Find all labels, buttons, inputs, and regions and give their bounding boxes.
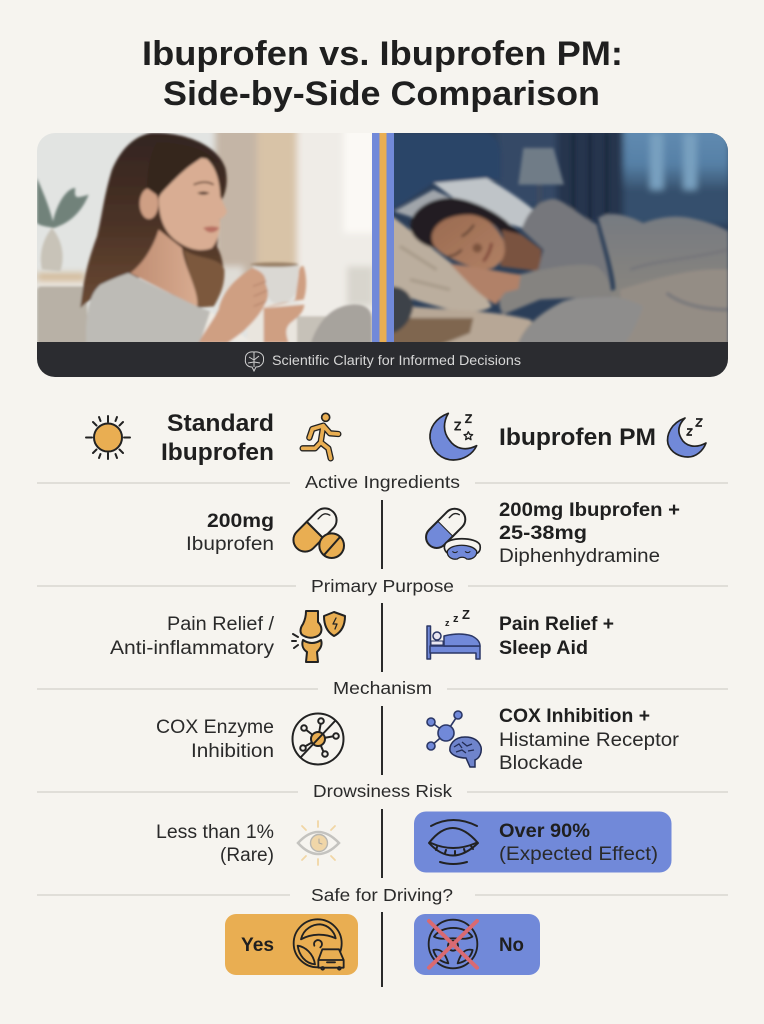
section: drowsiness risk: Drowsiness Risk	[313, 781, 452, 801]
icon: small moon	[668, 418, 706, 457]
drowsiness: pm callout: (Expected Effect)	[499, 844, 658, 865]
mechanism: pm: COX Inhibition +	[499, 706, 650, 727]
drowsiness: pm callout	[414, 812, 672, 872]
ear	[140, 188, 158, 219]
mechanism: pm	[427, 706, 680, 774]
mechanism: standard	[156, 714, 344, 764]
caption bar: Scientific Clarity for Informed Decisions	[272, 353, 521, 368]
title: Side-by-Side Comparison	[163, 75, 600, 113]
ingredient: pm: 25-38mg	[499, 523, 587, 544]
back pillows	[433, 178, 533, 228]
drowsiness: pm callout: Over 90%	[499, 821, 590, 842]
mechanism: pm: Histamine Receptor	[499, 730, 680, 751]
icon: knee joint and shield	[292, 611, 345, 662]
plant and vase	[41, 228, 63, 271]
drowsiness: standard: (Rare)	[220, 845, 274, 866]
icon: sun	[86, 416, 130, 459]
blanket	[526, 211, 728, 329]
right hand	[264, 266, 306, 343]
mug	[251, 265, 299, 304]
photo: woman sleeping	[390, 126, 730, 346]
hair	[80, 133, 227, 308]
icon: closed eye	[429, 820, 478, 864]
column header: ibuprofen pm	[430, 413, 706, 460]
drowsiness: standard: Less than 1%	[156, 822, 274, 843]
icon: person sleeping in bed: z	[445, 618, 450, 628]
ingredient: standard: Ibuprofen	[186, 534, 274, 555]
column header: standard ibuprofen: Ibuprofen	[161, 439, 274, 466]
icon: person sleeping in bed: z	[453, 613, 459, 625]
ingredient: standard: 200mg	[207, 511, 274, 532]
icon: moon with stars	[430, 413, 477, 460]
hero image panel	[37, 126, 730, 377]
section: mechanism: Mechanism	[333, 678, 432, 698]
facial features	[194, 182, 214, 185]
purpose: pm	[427, 607, 614, 659]
shirt	[86, 273, 210, 345]
mechanism: standard: Inhibition	[191, 741, 274, 762]
caption bar	[37, 342, 728, 377]
icon: blocked enzyme	[292, 714, 344, 764]
driving: yes badge	[225, 914, 358, 975]
purpose: standard: Pain Relief /	[167, 614, 275, 635]
drowsiness: standard	[156, 821, 339, 866]
icon: steering wheel and car	[294, 919, 344, 970]
purpose: pm: Pain Relief +	[499, 614, 614, 635]
headboard	[390, 133, 501, 210]
driving: yes badge: Yes	[241, 935, 274, 956]
icon: person sleeping in bed	[427, 607, 480, 659]
driving: no badge	[414, 914, 540, 975]
mechanism: standard: COX Enzyme	[156, 717, 274, 738]
hands	[450, 264, 521, 305]
front pillow	[390, 215, 492, 312]
section: active ingredients: Active Ingredients	[305, 472, 460, 492]
colour divider stripes	[372, 133, 394, 343]
knee	[310, 305, 372, 345]
ingredient: pm: 200mg Ibuprofen +	[499, 500, 680, 521]
section: safe for driving: Safe for Driving?	[311, 885, 453, 905]
left hand	[199, 268, 268, 343]
curtain folds	[573, 133, 607, 220]
ingredient: pm	[422, 500, 680, 567]
icon: molecule and brain	[427, 711, 481, 767]
title: Ibuprofen vs. Ibuprofen PM:	[142, 35, 623, 73]
hair	[410, 198, 521, 248]
title	[142, 35, 623, 113]
lamp	[518, 148, 564, 185]
column header: ibuprofen pm: Ibuprofen PM	[499, 424, 656, 451]
hair over forehead	[147, 154, 209, 196]
column header: standard ibuprofen	[86, 410, 338, 466]
face	[432, 215, 505, 269]
icon: capsule and sleep mask	[422, 504, 480, 559]
ingredient: pm: Diphenhydramine	[499, 546, 660, 567]
icon: person sleeping in bed: Z	[462, 607, 470, 622]
face	[159, 156, 227, 250]
section: primary purpose: Primary Purpose	[311, 576, 454, 596]
purpose: standard: Anti-inflammatory	[110, 638, 275, 659]
neck	[130, 230, 197, 307]
purpose: standard	[110, 611, 345, 662]
driving: no badge: No	[499, 935, 524, 956]
column header: standard ibuprofen: Standard	[167, 410, 274, 437]
sheet and nightstand	[408, 304, 534, 342]
icon: crossed steering wheel	[429, 920, 477, 968]
facial features	[448, 225, 474, 256]
ingredient: standard	[186, 504, 344, 558]
icon: open eye	[298, 821, 339, 865]
sweater	[499, 199, 612, 315]
icon: capsule and tablet	[289, 504, 344, 558]
neck	[500, 230, 542, 271]
icon: running person	[303, 413, 338, 458]
photo: woman with coffee	[37, 126, 377, 345]
purpose: pm: Sleep Aid	[499, 638, 588, 659]
icon: brain	[245, 352, 264, 371]
mechanism: pm: Blockade	[499, 753, 583, 774]
